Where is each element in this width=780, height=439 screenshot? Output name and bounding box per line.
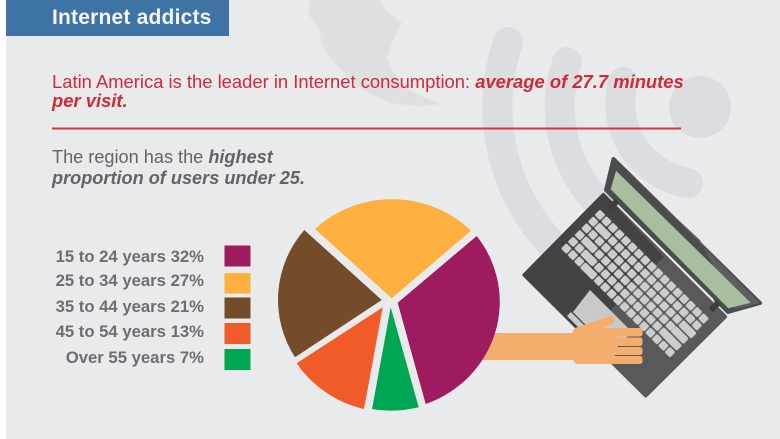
keyboard [560,208,711,359]
icon: hand and arm [480,316,642,364]
legend row: 45 to 54 years [56,322,250,344]
title banner [6,0,229,36]
fingers [605,328,642,364]
legend [56,246,250,370]
slice: over 55 years 7% [372,307,419,411]
title banner: Internet addicts [52,6,212,29]
slice: 45 to 54 years 13% [297,307,383,409]
subheading text: The region has the [52,147,208,167]
legend row: 15 to 24 years: 15 to 24 years 32% [56,247,204,266]
legend row: 45 to 54 years: 45 to 54 years 13% [56,322,204,341]
arm [480,333,580,360]
headline text: average of 27.7 minutes [475,71,684,92]
map silhouette: southern Latin America [308,0,442,106]
legend row: 35 to 44 years [56,297,250,318]
palm [573,316,615,364]
subheading text: highest [208,147,274,167]
trackpad [573,290,632,352]
icon: wifi signal [497,42,731,250]
slice: 15 to 24 years 32% [398,236,500,404]
icon: laptop [523,159,760,396]
laptop base [523,193,725,396]
trackpad button [567,312,590,335]
headline text: Latin America is the leader in Internet consumption: [52,71,475,92]
legend row: 35 to 44 years: 35 to 44 years 21% [56,297,204,316]
headline text: per visit. [51,90,128,111]
legend row: 25 to 34 years: 25 to 34 years 27% [56,271,204,290]
slice: 25 to 34 years 27% [315,199,471,298]
pie chart [278,199,500,411]
subheading text: proportion of users under 25. [51,168,305,188]
legend row: over 55 years: Over 55 years 7% [66,348,204,367]
hinge slit [618,205,713,300]
legend row: 15 to 24 years [56,246,250,266]
laptop screen [606,159,760,312]
divider line [52,128,681,130]
slice: 35 to 44 years 21% [278,230,382,357]
hinges [607,199,619,211]
legend row: over 55 years [66,348,250,370]
legend row: 25 to 34 years [56,271,250,294]
